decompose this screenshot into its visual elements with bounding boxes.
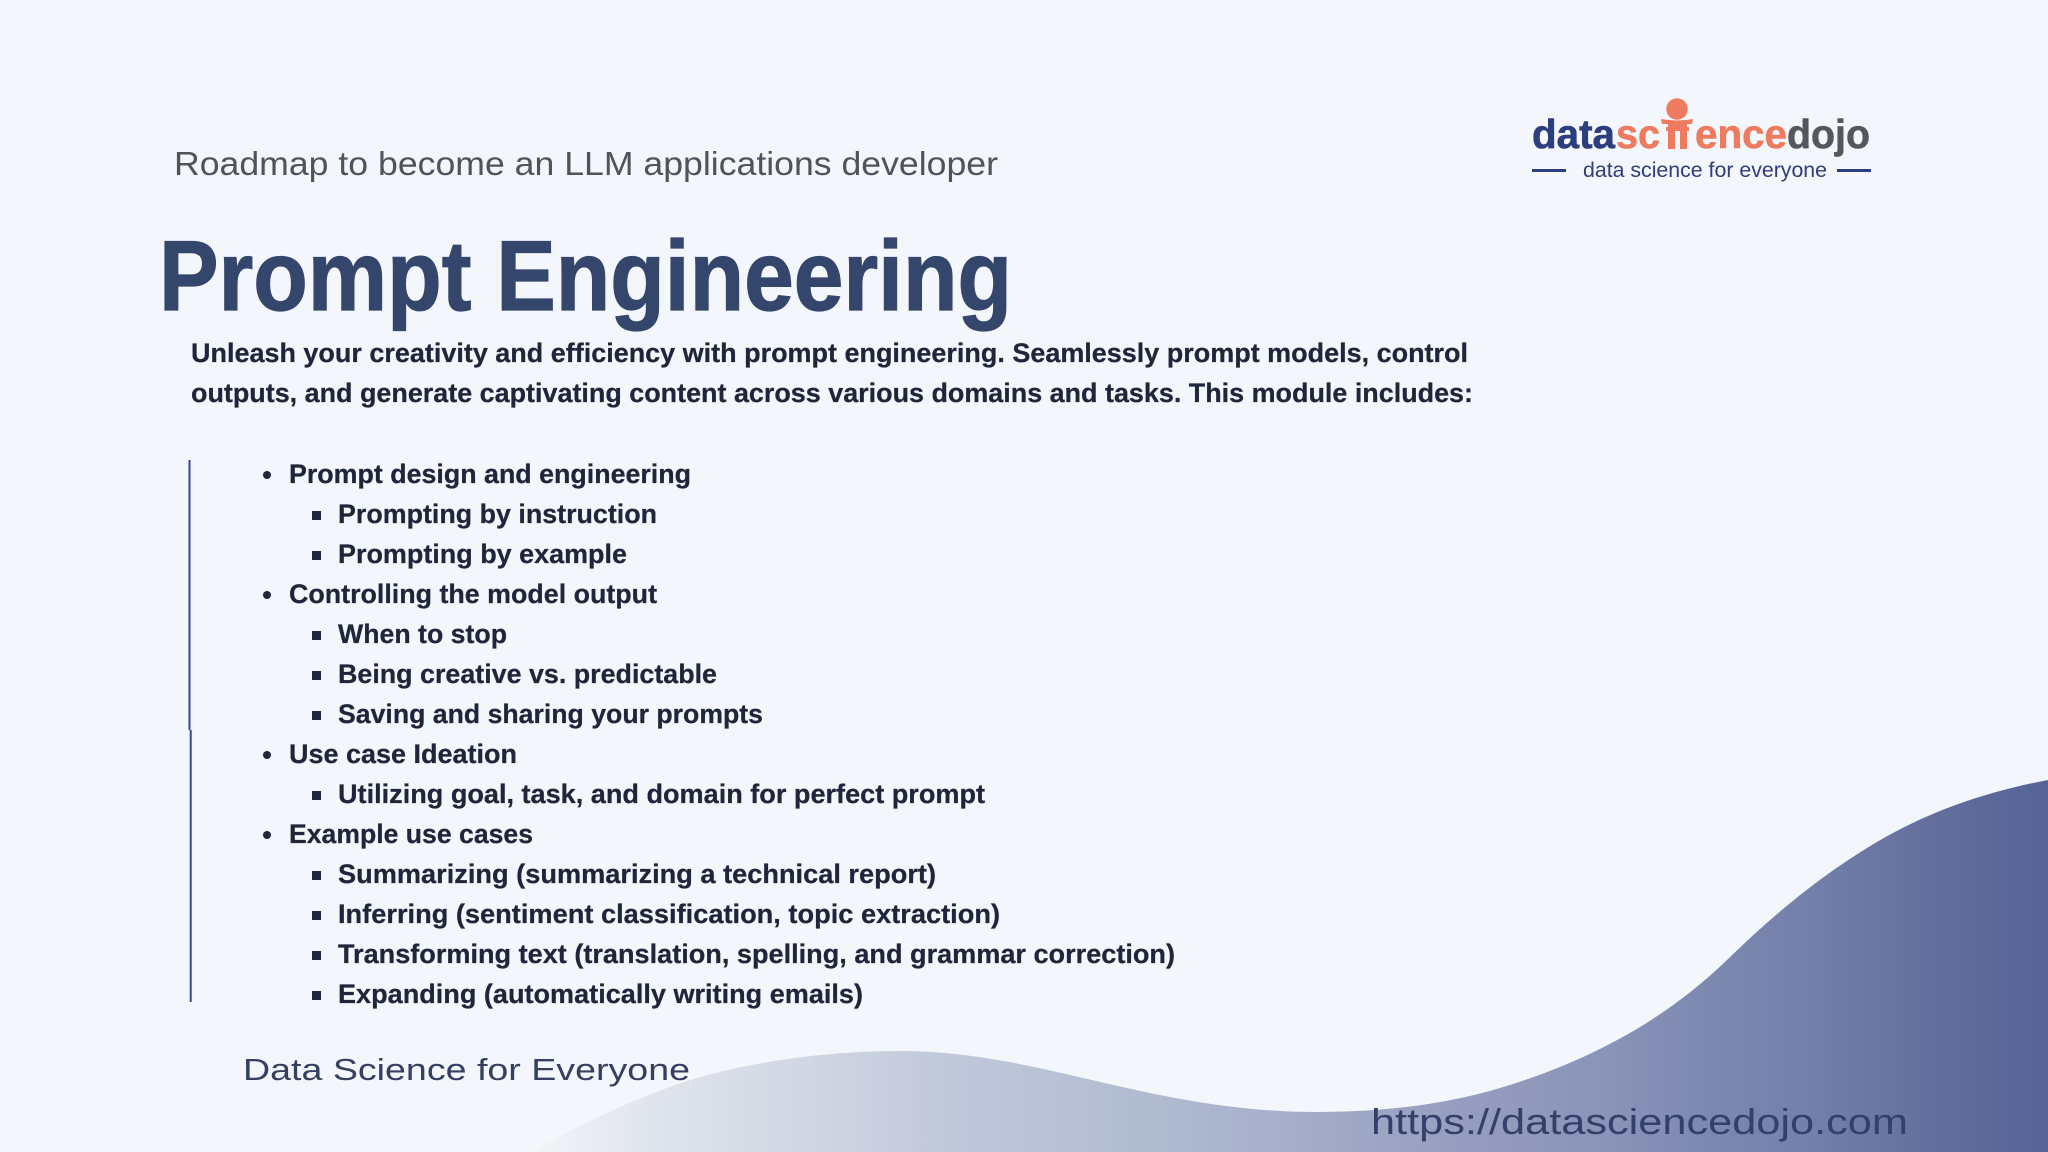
list group: example use cases: Example use cases	[289, 819, 533, 849]
list group: example use cases: Summarizing (summarizing a technical report)	[338, 859, 936, 889]
logo: data science dojo	[1532, 98, 1871, 182]
intro paragraph: outputs, and generate captivating content across various domains and tasks. This module includes:	[191, 378, 1473, 408]
bulleted module list	[263, 459, 1175, 1009]
list group: use case ideation	[263, 739, 985, 809]
list group: prompt design: Prompt design and engineering	[289, 459, 691, 489]
list group: example use cases: Inferring (sentiment classification, topic extraction)	[338, 899, 1000, 929]
logo: data science dojo: ence	[1695, 111, 1787, 157]
list group: controlling output: Saving and sharing your prompts	[338, 699, 763, 729]
list group: controlling output	[263, 579, 763, 729]
vertical accent line	[190, 460, 191, 1002]
list group: example use cases: Expanding (automatically writing emails)	[338, 979, 863, 1009]
list group: controlling output: When to stop	[338, 619, 507, 649]
logo: data science dojo: data science for everyone	[1583, 159, 1827, 182]
list group: prompt design: Prompting by example	[338, 539, 627, 569]
list group: example use cases	[263, 819, 1175, 1009]
background wave	[530, 780, 2048, 1152]
list group: prompt design	[263, 459, 691, 569]
list group: use case ideation: Use case Ideation	[289, 739, 517, 769]
list group: controlling output: Being creative vs. predictable	[338, 659, 717, 689]
list group: use case ideation: Utilizing goal, task, and domain for perfect prompt	[338, 779, 985, 809]
title: Prompt Engineering	[159, 220, 1012, 331]
logo: data science dojo: sc	[1616, 111, 1660, 157]
footer tagline: Data Science for Everyone	[243, 1052, 690, 1087]
website url: https://datasciencedojo.com	[1371, 1101, 1908, 1142]
logo: data science dojo: data	[1532, 111, 1616, 157]
subtitle: Roadmap to become an LLM applications developer	[174, 145, 998, 182]
intro paragraph: Unleash your creativity and efficiency with prompt engineering. Seamlessly prompt models, control	[191, 338, 1468, 368]
list group: controlling output: Controlling the model output	[289, 579, 657, 609]
intro paragraph	[191, 338, 1473, 408]
list group: prompt design: Prompting by instruction	[338, 499, 657, 529]
logo: data science dojo: dojo	[1787, 111, 1870, 157]
list group: example use cases: Transforming text (translation, spelling, and grammar correction)	[338, 939, 1175, 969]
